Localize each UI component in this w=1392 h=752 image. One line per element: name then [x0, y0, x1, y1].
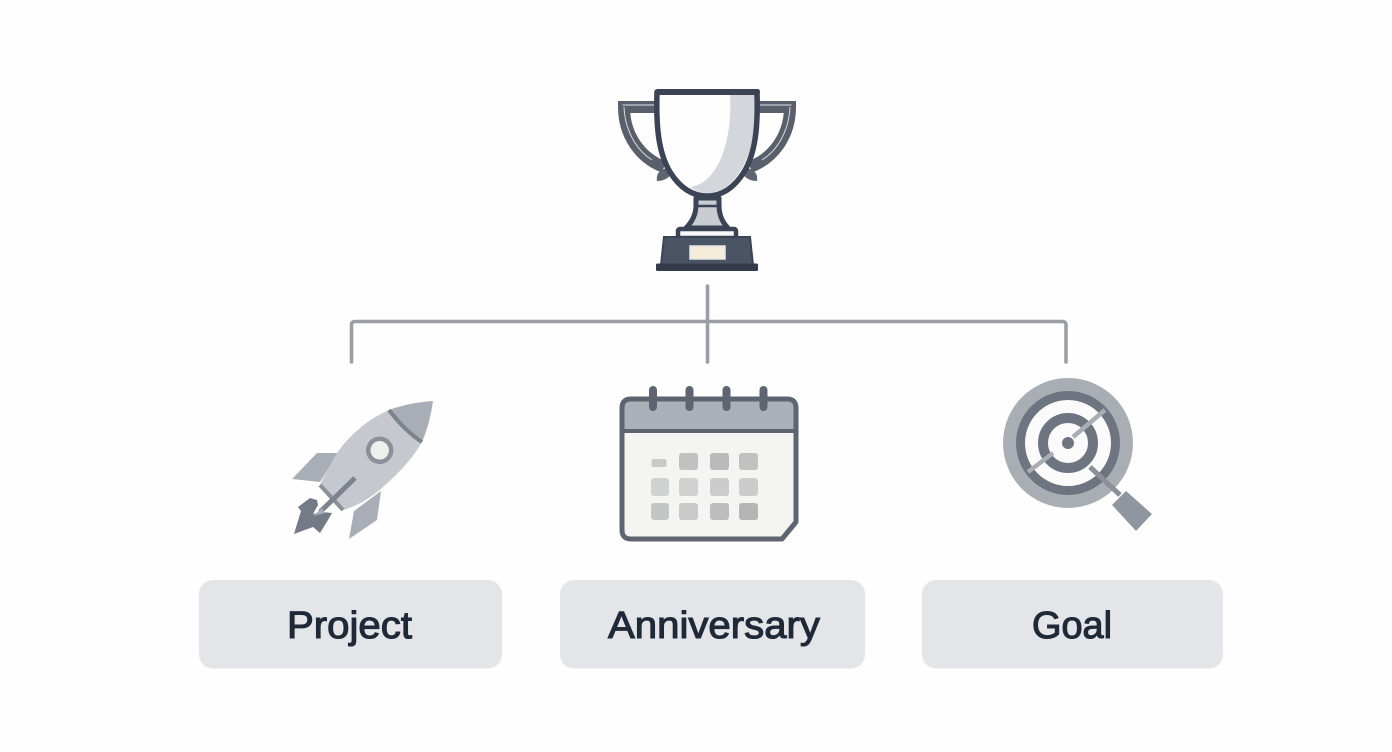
calendar date grid	[651, 453, 758, 520]
label: Goal: Goal	[1032, 605, 1112, 647]
label: Project	[199, 580, 502, 668]
icon: trophy	[622, 89, 792, 271]
label: Goal	[922, 580, 1223, 668]
icon: target	[1003, 378, 1152, 531]
label: Anniversary	[560, 580, 865, 668]
label: Anniversary: Anniversary	[608, 605, 820, 647]
calendar rings	[653, 390, 764, 407]
icon: rocket	[292, 401, 433, 539]
label: Project: Project	[287, 605, 412, 647]
connector lines	[352, 286, 1066, 362]
icon: calendar	[622, 390, 796, 539]
